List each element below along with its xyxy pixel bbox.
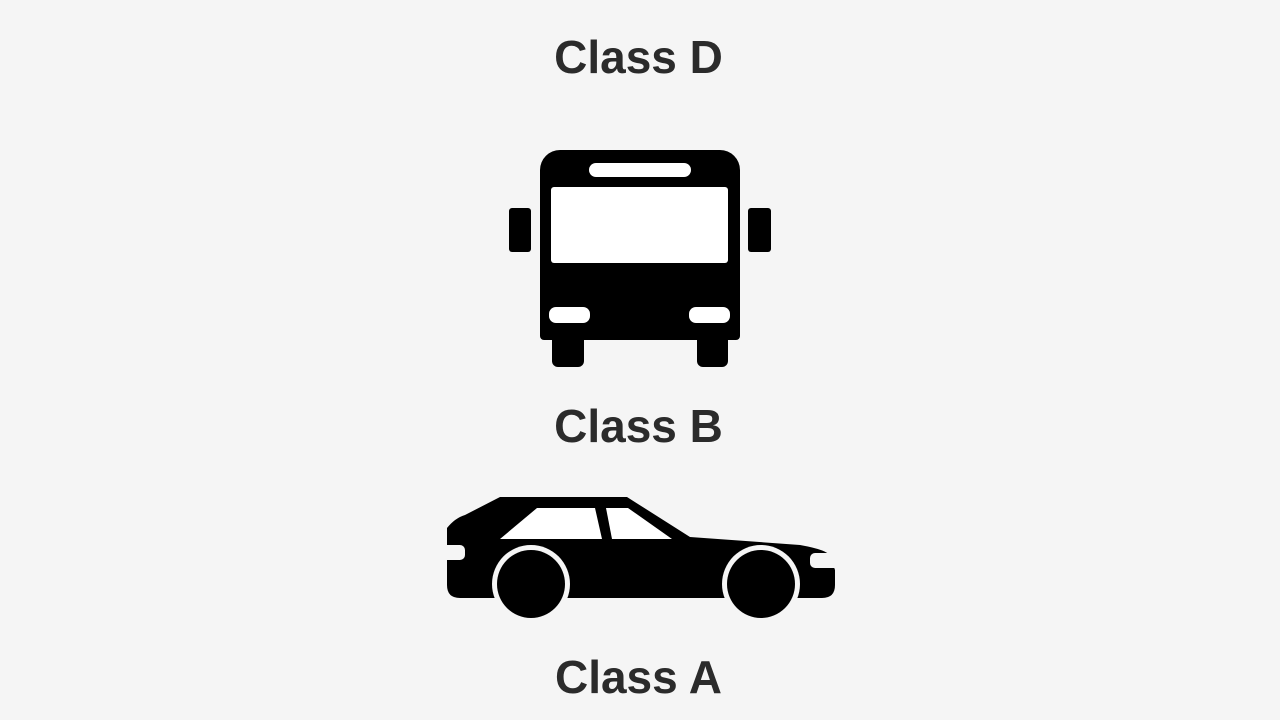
label: Class A: Class A — [555, 651, 722, 703]
icon: bus — [509, 150, 771, 367]
title: Class D: Class D — [554, 31, 723, 83]
label: Class B: Class B — [554, 400, 723, 452]
icon: car — [440, 497, 842, 623]
